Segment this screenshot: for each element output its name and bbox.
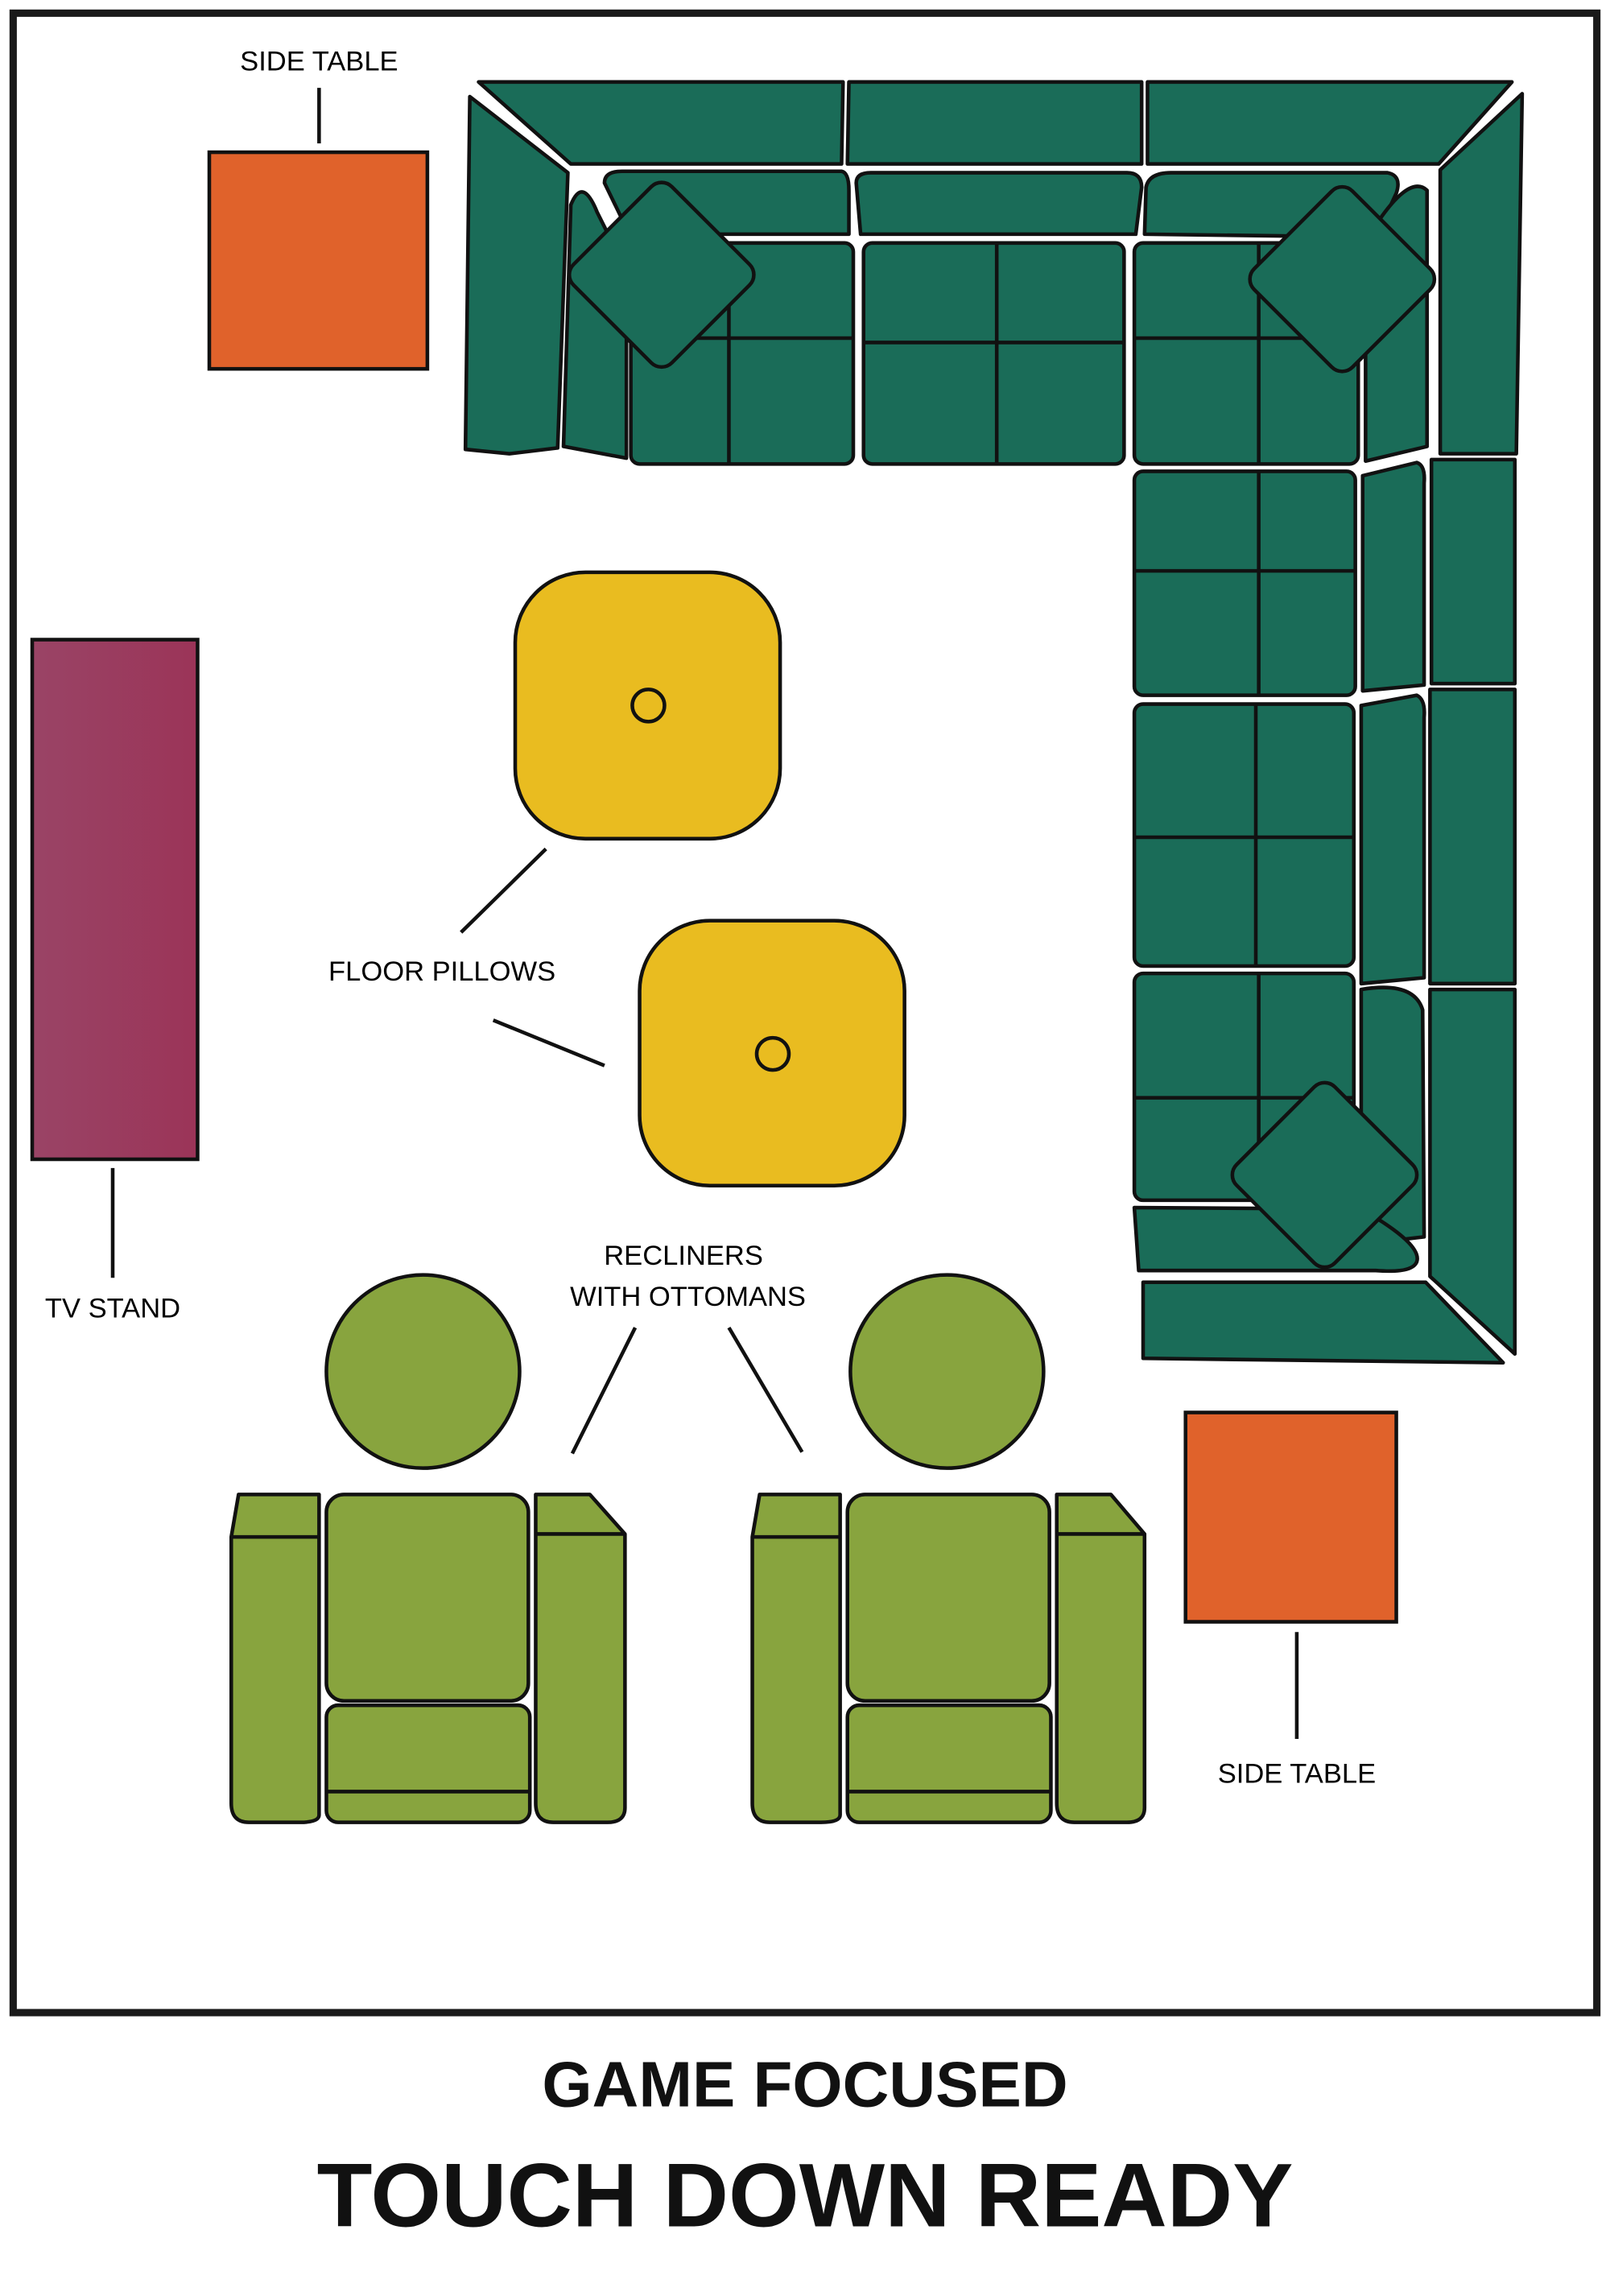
right inner arms: [1365, 187, 1427, 461]
right column seats: [1134, 471, 1356, 696]
side table bottom-right: SIDE TABLE: [1218, 1759, 1376, 1790]
left inner arm: [564, 192, 626, 458]
side table top-left: SIDE TABLE: [240, 46, 398, 76]
title: TOUCH DOWN READY: [317, 2144, 1293, 2245]
bottom back: [1143, 1282, 1503, 1363]
tv stand: [32, 640, 197, 1324]
right back: [1440, 93, 1522, 454]
floor pillows label: FLOOR PILLOWS: [328, 956, 555, 987]
bottom inner: [1134, 1208, 1418, 1271]
title: [317, 2048, 1293, 2245]
left back arm: [465, 97, 568, 454]
pillows: [564, 176, 760, 373]
side table top-left: [209, 46, 427, 369]
recliners label: WITH OTTOMANS: [570, 1282, 806, 1312]
top back: [479, 82, 843, 164]
seat divisions: [631, 243, 1358, 1200]
top inner backs: [605, 171, 849, 234]
title: GAME FOCUSED: [542, 2048, 1068, 2120]
tv stand: TV STAND: [45, 1293, 180, 1324]
recliners: [231, 1275, 1145, 1823]
floor pillows: [461, 572, 905, 1186]
side table bottom-right: [1186, 1413, 1397, 1790]
top seats: [631, 243, 853, 464]
recliners label: RECLINERS: [604, 1241, 763, 1271]
sectional sofa: [465, 82, 1522, 1363]
